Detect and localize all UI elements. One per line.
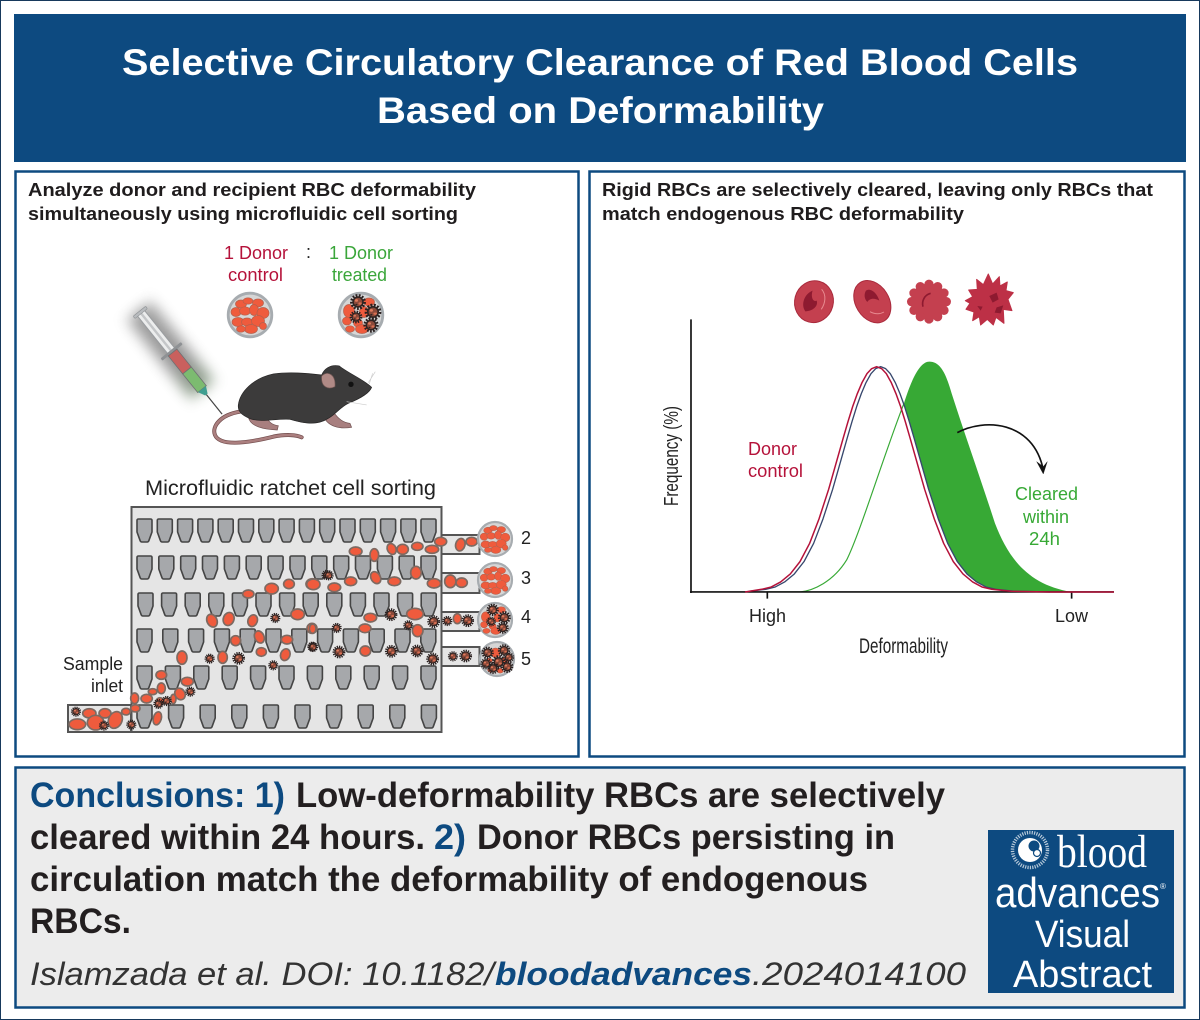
x-axis tick labels: [749, 606, 1089, 626]
label: sample inlet: Sample: [63, 654, 123, 674]
icon: control cell dish: [228, 293, 272, 337]
y-axis label: Frequency (%): [661, 406, 683, 506]
label: donor control: 1 Donor: [224, 243, 288, 263]
outlet numbers: [521, 528, 531, 669]
conclusions text: [30, 776, 946, 941]
label: cleared within 24h: Cleared: [1015, 484, 1078, 504]
panel heading: rigid RBCs cleared: [602, 179, 1153, 224]
label: sample inlet: [63, 654, 123, 696]
curve: donor control: [745, 367, 1114, 592]
panel heading: analyze deformability: Analyze donor and recipient RBC deformability: [28, 179, 477, 200]
conclusions text: Conclusions: 1): [30, 776, 285, 815]
journal logo: ®: [1160, 882, 1166, 891]
panel heading: rigid RBCs cleared: match endogenous RBC deformability: [602, 203, 965, 224]
conclusions text: Low-deformability RBCs are selectively: [296, 776, 946, 815]
axes: [690, 319, 1114, 599]
cleared population area: [904, 362, 1072, 592]
x-axis tick labels: High: [749, 606, 786, 626]
label: sample inlet: inlet: [91, 676, 123, 696]
panel: conclusions: [16, 768, 1184, 1008]
panel heading: analyze deformability: [28, 179, 477, 224]
panel: selective clearance: [590, 172, 1184, 756]
icon: mouse: [214, 366, 375, 443]
citation: Islamzada et al. DOI: 10.1182/: [30, 956, 497, 992]
label: donor control curve: [748, 439, 803, 481]
arrow: cleared: [957, 425, 1047, 474]
citation: .2024014100: [752, 956, 966, 992]
title banner: Selective Circulatory Clearance of Red Blood Cells: [122, 42, 1078, 83]
journal logo: Abstract: [1013, 954, 1152, 996]
conclusions text: Donor RBCs persisting in: [477, 818, 895, 857]
icon: treated cell dish: [339, 293, 383, 337]
microfluidic chip diagram: [68, 507, 514, 732]
x-axis label: Deformability: [859, 635, 948, 658]
label: donor treated: treated: [332, 265, 387, 285]
curve: treated donor: [767, 403, 904, 592]
panel heading: rigid RBCs cleared: Rigid RBCs are selectively cleared, leaving only RBCs that: [602, 179, 1153, 200]
outlet numbers: 2: [521, 528, 531, 548]
icon: syringe: [127, 301, 234, 423]
citation: bloodadvances: [495, 956, 752, 992]
label: donor treated: 1 Donor: [329, 243, 393, 263]
citation: [30, 956, 966, 992]
label: donor treated: [329, 243, 393, 285]
label: donor control: control: [228, 265, 283, 285]
outlet numbers: 5: [521, 649, 531, 669]
journal logo: blood: [1057, 826, 1147, 878]
icon: red cell morphologies: [790, 274, 1013, 330]
journal logo: [988, 826, 1174, 996]
ratio colon: :: [306, 242, 311, 262]
label: cleared within 24h: [1015, 484, 1078, 549]
icon: society seal: [1012, 832, 1048, 868]
journal logo: Visual: [1035, 914, 1130, 956]
title banner: [14, 14, 1186, 162]
heading: microfluidic ratchet cell sorting: Microfluidic ratchet cell sorting: [145, 477, 436, 500]
conclusions text: circulation match the deformability of endogenous: [30, 860, 868, 899]
panel heading: analyze deformability: simultaneously using microfluidic cell sorting: [28, 203, 458, 224]
x-axis tick labels: Low: [1055, 606, 1089, 626]
label: donor control: [224, 243, 288, 285]
deformability chart: [690, 274, 1114, 599]
outlet numbers: 4: [521, 607, 531, 627]
conclusions text: RBCs.: [30, 902, 131, 941]
outlet numbers: 3: [521, 568, 531, 588]
curve: recipient: [749, 367, 1050, 592]
conclusions text: cleared within 24 hours.: [30, 818, 425, 857]
journal logo: advances: [995, 869, 1160, 916]
conclusions text: 2): [434, 818, 466, 857]
label: donor control curve: control: [748, 461, 803, 481]
panel: microfluidic analysis: [16, 172, 578, 756]
title banner: Based on Deformability: [377, 90, 824, 131]
label: cleared within 24h: 24h: [1029, 529, 1060, 549]
label: cleared within 24h: within: [1022, 507, 1069, 527]
label: donor control curve: Donor: [748, 439, 797, 459]
